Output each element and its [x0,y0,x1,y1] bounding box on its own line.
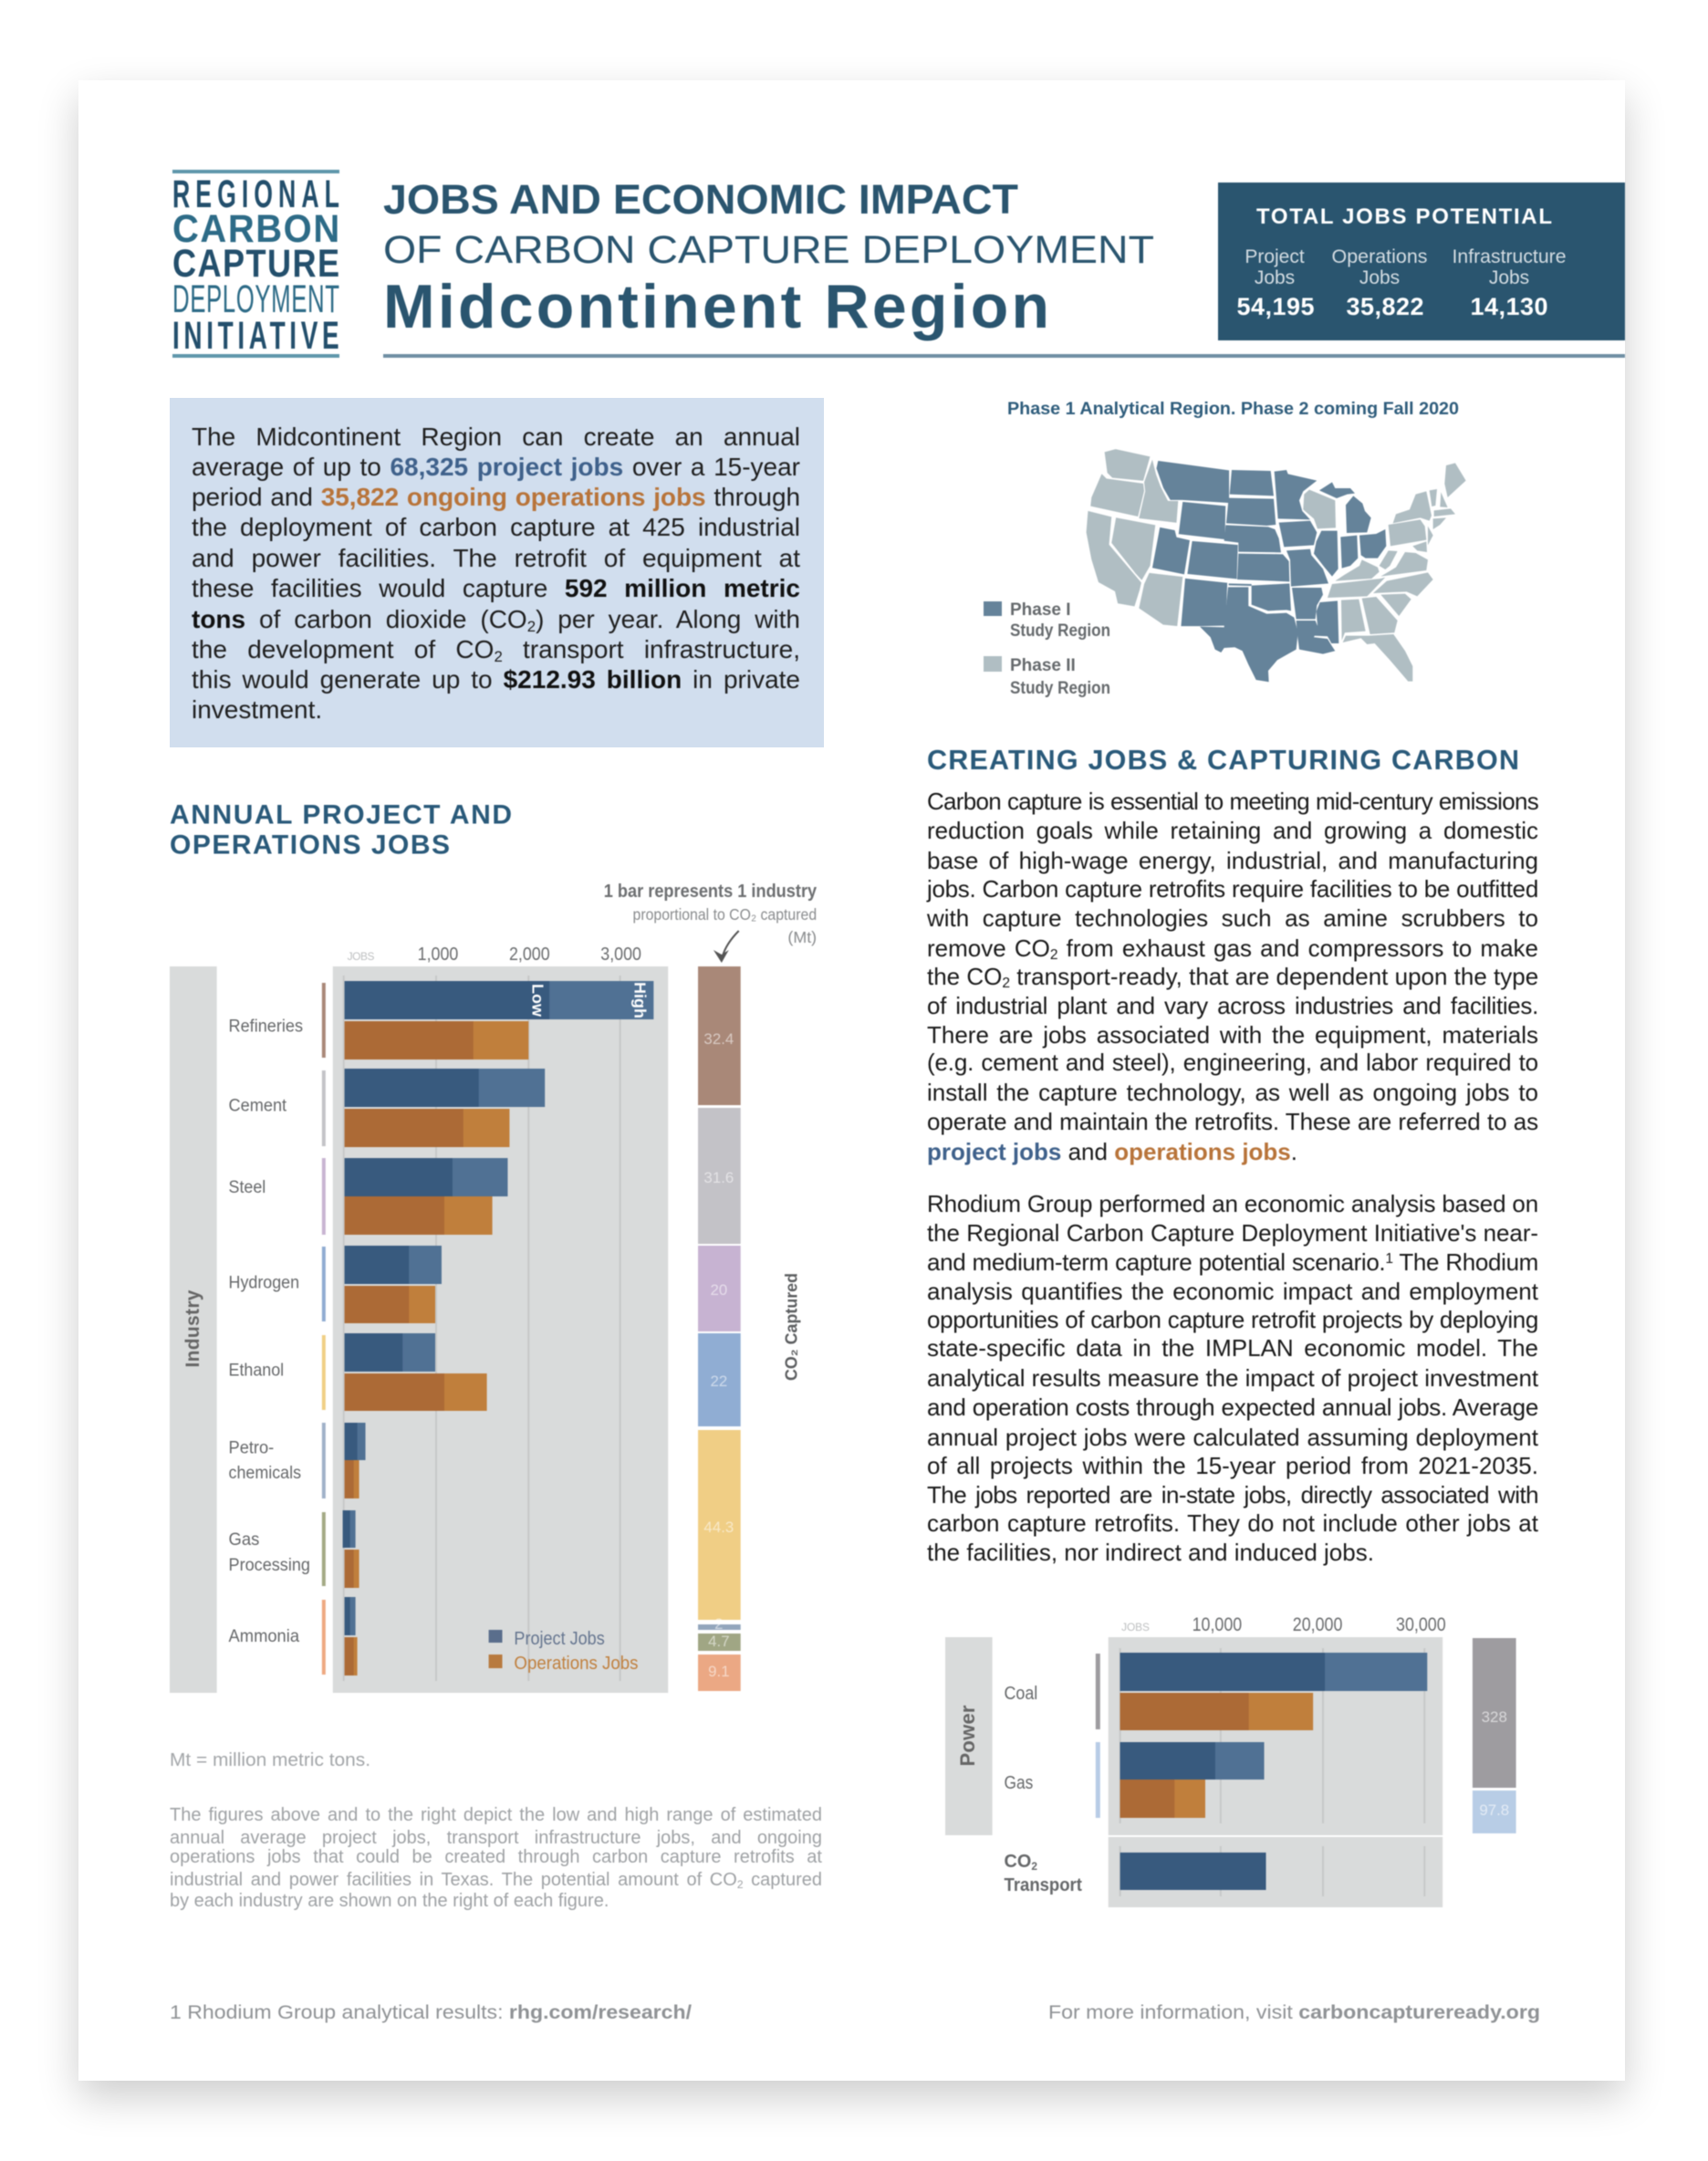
logo: Regional Carbon Capture Deployment Initiative: DEPLOYMENT [172,277,339,321]
axis labels: 3,000 [600,945,641,965]
industry side band [170,966,217,1693]
text block: creating jobs paragraph 1: operate and maintain the retrofits. These are referred to as [927,1108,1538,1135]
text block: creating jobs paragraph 2: analytical results measure the impact of project investment [927,1364,1538,1392]
stacked bar: CO2 captured by industry: 9.1 [708,1663,730,1680]
industry labels: Processing [229,1556,310,1575]
legend: jobs type: Project Jobs [514,1629,605,1649]
power labels: Coal [1005,1684,1037,1704]
intro text: these facilities would capture 592 million metric [192,574,800,602]
low and high range labels: High [631,982,649,1018]
stacked bar: CO2 captured by industry: 22 [710,1373,727,1390]
title: Midcontinent Region [383,272,1049,341]
text block: creating jobs paragraph 1 [925,788,1539,1166]
text block: creating jobs paragraph 1: remove CO2 from exhaust gas and compressors to make [927,934,1538,963]
text block: creating jobs paragraph 1: project jobs and operations jobs. [927,1138,1297,1165]
power labels [1005,1684,1082,1895]
intro text: tons of carbon dioxide (CO2) per year. Along with [192,605,800,635]
industry side band: Industry [182,1289,203,1367]
annotation: one bar represents one industry [604,882,817,946]
text block: chart notes: operations jobs that could be created through carbon capture retrofits at [170,1847,822,1867]
map heading: Phase 1 Analytical Region. Phase 2 coming Fall 2020 [1007,399,1459,419]
axis label: CO2 captured: CO₂ Captured [782,1273,801,1381]
power labels: CO [1005,1852,1031,1872]
power chart section [945,1614,1516,1907]
industry labels: Steel [229,1178,266,1197]
text block: creating jobs paragraph 1: install the capture technology, as well as ongoing jobs to [927,1079,1538,1106]
panel: total jobs potential: Jobs [1359,267,1400,288]
operations jobs bars: low range [345,1021,474,1676]
text block: creating jobs paragraph 1: (e.g. cement and steel), engineering, and labor required to [927,1049,1538,1076]
axis labels: 2,000 [509,945,550,965]
annotation: one bar represents one industry: 1 bar represents 1 industry [604,882,817,902]
panel: total jobs potential: Jobs [1255,267,1295,288]
stacked bar: CO2 captured by industry: 4.7 [708,1633,730,1650]
logo: Regional Carbon Capture Deployment Initiative: REGIONAL [172,172,339,216]
panel: total jobs potential: Operations [1332,246,1427,267]
text block: creating jobs paragraph 2: annual project jobs were calculated assuming deployment [927,1424,1538,1451]
map legend: Phase II [1010,656,1076,675]
axis labels: 10,000 [1192,1614,1242,1635]
axis labels [348,945,641,965]
text block: creating jobs paragraph 1: Carbon capture is essential to meeting mid-century emissions [927,788,1538,815]
text block: creating jobs paragraph 2: the facilities, nor indirect and induced jobs. [927,1539,1374,1566]
industry chart section [170,882,817,1693]
intro text: the development of CO2 transport infrastructure, [192,635,800,665]
panel: total jobs potential: TOTAL JOBS POTENTIAL [1256,204,1552,229]
text block: creating jobs paragraph 2 [927,1190,1539,1566]
heading: annual project and operations jobs: ANNUAL PROJECT AND [170,799,512,830]
panel: total jobs potential: Infrastructure [1453,246,1566,267]
power side band: Power [956,1705,979,1767]
panel: total jobs potential: 54,195 [1237,293,1314,320]
text block: chart notes: by each industry are shown on the right of each figure. [170,1891,609,1911]
industry labels: Refineries [229,1017,303,1037]
stacked bar: CO2 captured by industry: 31.6 [703,1169,734,1186]
title [383,176,1154,341]
text block: chart notes: industrial and power facilities in Texas. The potential amount of CO2 captured [170,1870,822,1891]
stacked bar: CO2 captured by power source: 328 [1482,1708,1507,1726]
intro text: period and 35,822 ongoing operations jobs through [192,483,800,511]
text block: creating jobs paragraph 2: of all projects within the 15-year period from 2021-2035. [927,1452,1538,1479]
low and high range labels [528,982,649,1018]
text block: creating jobs paragraph 2: Rhodium Group performed an economic analysis based on [927,1190,1538,1217]
stacked bar: CO2 captured by industry: 20 [710,1281,727,1299]
map legend [984,600,1110,698]
text block: creating jobs paragraph 2: state-specific data in the IMPLAN economic model. The [927,1334,1538,1362]
intro text: this would generate up to $212.93 billion in private [192,665,800,694]
heading: creating jobs: CREATING JOBS & CAPTURING CARBON [927,745,1519,776]
axis labels: 1,000 [418,945,458,965]
project jobs bars: low range [343,981,549,1635]
panel: total jobs potential: Project [1245,246,1305,267]
power labels: Gas [1005,1773,1033,1793]
industry labels: chemicals [229,1464,301,1483]
map legend: Study Region [1010,679,1110,698]
text block: creating jobs paragraph 1: with capture technologies such as amine scrubbers to [927,904,1538,932]
CO2 transport bar [1120,1853,1266,1890]
axis labels [1121,1614,1446,1635]
logo: Regional Carbon Capture Deployment Initiative: INITIATIVE [172,313,339,357]
axis labels: JOBS [348,950,374,963]
panel: total jobs potential: 35,822 [1347,293,1423,320]
power labels: 2 [1031,1860,1037,1873]
text block: creating jobs paragraph 2: The jobs reported are in-state jobs, directly associated with [927,1481,1538,1509]
industry labels: Gas [229,1530,259,1550]
intro text: average of up to 68,325 project jobs over a 15-year [192,453,800,481]
text block: creating jobs paragraph 2: and medium-term capture potential scenario.1 The Rhodium [927,1248,1538,1276]
stacked bar: CO2 captured by industry: 44.3 [703,1519,734,1536]
power side band [945,1637,993,1835]
footer link: For more information, visit carboncaptureready.org [1048,2002,1540,2023]
text block: creating jobs paragraph 1: jobs. Carbon capture retrofits require facilities to be outfitted [927,875,1538,903]
stacked bar: CO2 captured by industry [698,966,741,1691]
title: OF CARBON CAPTURE DEPLOYMENT [383,228,1154,272]
industry labels: Hydrogen [229,1273,299,1293]
legend: jobs type [489,1629,639,1674]
industry labels [229,1017,310,1646]
header rule [383,354,1625,358]
map of US states by study phase [1086,449,1466,682]
text block: creating jobs paragraph 2: the Regional Carbon Capture Deployment Initiative's near- [927,1219,1538,1247]
industry labels: Petro- [229,1438,274,1458]
panel: total jobs potential [1218,183,1625,340]
text block: creating jobs paragraph 2: analysis quantifies the economic impact and employment [927,1278,1538,1305]
axis labels: JOBS [1121,1621,1150,1634]
text block: creating jobs paragraph 2: and operation costs through expected annual jobs. Average [927,1394,1538,1421]
logo: Regional Carbon Capture Deployment Initiative: CAPTURE [172,242,339,286]
low and high range labels: Low [528,984,547,1017]
text block: chart notes: The figures above and to the right depict the low and high range of estimated [170,1805,822,1825]
power labels: Transport [1005,1875,1082,1895]
note: Mt definition: Mt = million metric tons. [170,1750,370,1770]
axis labels: 20,000 [1293,1614,1342,1635]
industry colour keys [322,983,326,1675]
panel: intro summary [170,398,824,747]
text block: creating jobs paragraph 2: opportunities of carbon capture retrofit projects by deploying [927,1306,1538,1333]
axis labels: 30,000 [1396,1614,1446,1635]
text block: creating jobs paragraph 1: reduction goals while retaining and growing a domestic [927,817,1538,844]
intro text: investment. [192,695,322,724]
panel: total jobs potential: Jobs [1489,267,1529,288]
footnote: 1 Rhodium Group analytical results: rhg.com/research/ [170,2002,692,2023]
chart: power and CO2 transport jobs bars [945,1614,1446,1907]
project jobs bars: high range [343,981,653,1635]
stacked bar: CO2 captured by industry: 2 [714,1615,724,1633]
legend: jobs type: Operations Jobs [514,1654,639,1674]
panel: total jobs potential: 14,130 [1471,293,1547,320]
heading: annual project and operations jobs: OPERATIONS JOBS [170,830,450,860]
text block: creating jobs paragraph 1: the CO2 transport-ready, that are dependent upon the type [927,963,1538,991]
arrow to CO2 stacked bar [713,931,739,963]
text block: chart notes [170,1805,823,1911]
intro text: the deployment of carbon capture at 425 industrial [192,513,800,541]
industry labels: Ammonia [229,1627,299,1646]
heading: annual project and operations jobs [170,799,512,860]
text block: creating jobs paragraph 1: of industrial plant and vary across industries and facilities. [927,992,1538,1019]
intro text [192,423,801,724]
map legend: Phase I [1010,600,1071,620]
stacked bar: CO2 captured by power source [1473,1638,1516,1833]
stacked bar: CO2 captured by industry: 32.4 [703,1030,734,1048]
industry labels: Ethanol [229,1361,284,1381]
annotation: one bar represents one industry: (Mt) [787,928,817,946]
power colour keys [1096,1654,1100,1818]
intro text: and power facilities. The retrofit of equipment at [192,544,800,572]
title: JOBS AND ECONOMIC IMPACT [383,176,1018,223]
annotation: one bar represents one industry: proportional to CO₂ captured [633,905,817,924]
chart: industry jobs bars [170,945,668,1693]
intro text: The Midcontinent Region can create an annual [192,423,800,451]
industry labels: Cement [229,1096,287,1116]
text block: creating jobs paragraph 2: carbon capture retrofits. They do not include other jobs at [927,1509,1538,1537]
text block: chart notes: annual average project jobs, transport infrastructure jobs, and ongoing [170,1828,822,1848]
logo: Regional Carbon Capture Deployment Initiative: CARBON [172,206,339,250]
text block: creating jobs paragraph 1: base of high-wage energy, industrial, and manufacturing [927,847,1538,874]
stacked bar: CO2 captured by power source: 97.8 [1479,1801,1509,1819]
coal and gas bars [1120,1653,1427,1818]
text block: creating jobs paragraph 1: There are jobs associated with the equipment, materials [927,1021,1538,1049]
logo: Regional Carbon Capture Deployment Initiative [172,170,339,358]
map legend: Study Region [1010,621,1110,641]
operations jobs bars: high range [345,1021,528,1676]
